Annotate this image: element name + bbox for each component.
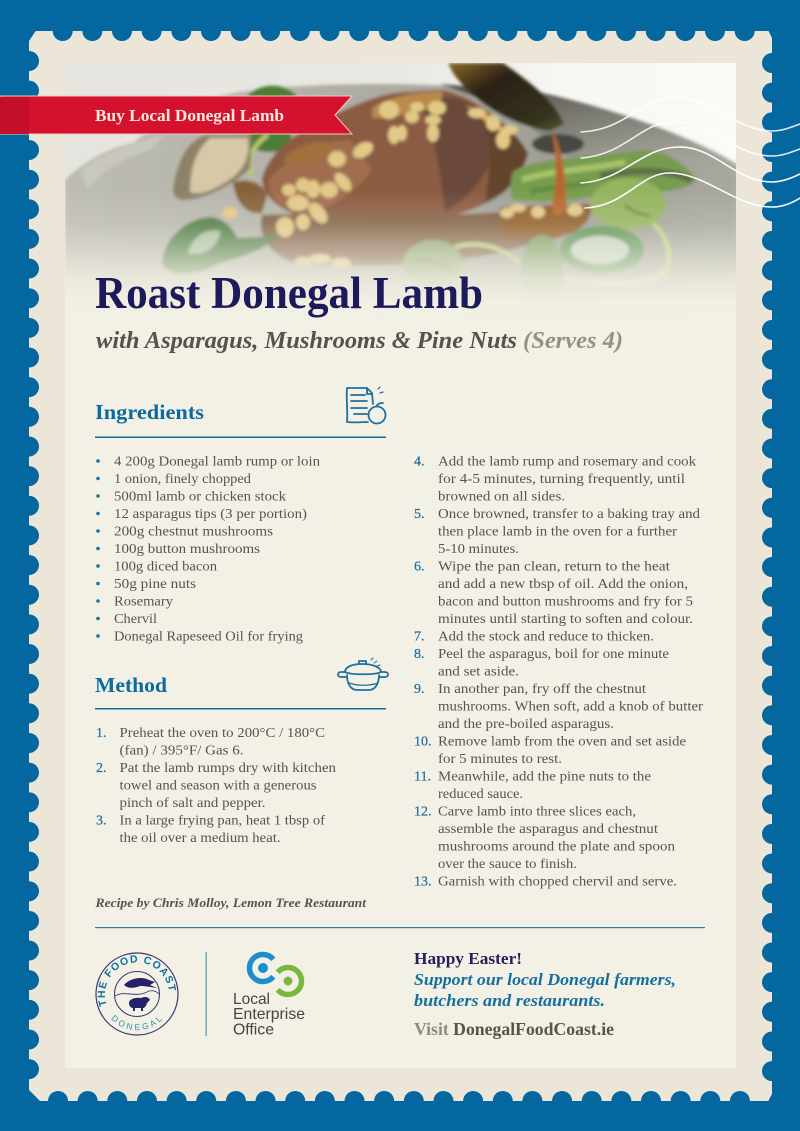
method steps 4-13: 4. (414, 454, 424, 470)
method steps 4-13: Garnish with chopped chervil and serve. (438, 874, 677, 888)
call to action: butchers and restaurants. (414, 991, 605, 1010)
asparagus (511, 150, 697, 202)
heading: method: Method (95, 673, 167, 697)
method steps 4-13: Meanwhile, add the pine nuts to the (438, 768, 651, 784)
ribbon: Buy Local Donegal Lamb (0, 96, 352, 134)
method steps 4-13: over the sauce to finish. (438, 856, 577, 871)
method steps 4-13: In another pan, fry off the chestnut (438, 681, 646, 696)
ingredients list: 12 asparagus tips (3 per portion) (114, 506, 307, 521)
logo: The Food Coast Donegal (95, 952, 179, 1036)
logo: Local Enterprise Office: Office (233, 1022, 274, 1038)
ribbon: Buy Local Donegal Lamb: Buy Local Donegal Lamb (95, 106, 284, 125)
method steps 1-3: 3. (96, 814, 106, 828)
method steps 1-3: towel and season with a generous (120, 778, 316, 792)
ingredients list: 100g diced bacon (114, 558, 217, 574)
method steps 4-13: then place lamb in the oven for a further (438, 524, 678, 538)
logo: The Food Coast Donegal: THE FOOD COAST (98, 955, 176, 1007)
method steps 4-13: for 5 minutes to rest. (438, 751, 562, 766)
call to action: Visit DonegalFoodCoast.ie (414, 1019, 614, 1039)
food photo (65, 63, 736, 296)
dark shape under spoon (532, 134, 584, 154)
ingredients list: Donegal Rapeseed Oil for frying (114, 628, 303, 644)
method steps 1-3: Pat the lamb rumps dry with kitchen (120, 760, 336, 775)
method steps 1-3: pinch of salt and pepper. (120, 795, 266, 810)
method steps 4-13: Once browned, transfer to a baking tray and (438, 506, 700, 521)
method steps 4-13: bacon and button mushrooms and fry for 5 (438, 594, 693, 608)
method steps 4-13: Wipe the pan clean, return to the heat (438, 558, 670, 574)
icon: recipe sheet with fruit (347, 387, 386, 424)
method steps 4-13: reduced sauce. (438, 786, 523, 801)
icon: cooking pot (338, 658, 388, 690)
method steps 4-13: 9. (414, 682, 424, 697)
call to action: Support our local Donegal farmers, (414, 970, 676, 989)
leaf behind ribbon (247, 86, 297, 152)
logo: Local Enterprise Office: Enterprise (233, 1006, 305, 1023)
ingredients list (96, 454, 320, 644)
method steps 4-13: 13. (414, 874, 432, 890)
heading: ingredients: Ingredients (95, 400, 204, 424)
method steps 1-3: the oil over a medium heat. (120, 830, 280, 845)
round leaves and stems (651, 222, 672, 276)
recipe credit: Recipe by Chris Molloy, Lemon Tree Restaurant (94, 895, 366, 910)
method steps 4-13: Add the stock and reduce to thicken. (438, 628, 654, 644)
logo: Local Enterprise Office (233, 955, 305, 1038)
method steps 4-13: 7. (414, 630, 424, 644)
method steps 4-13: for 4-5 minutes, turning frequently, until (438, 471, 685, 486)
ingredients list: Chervil (114, 611, 157, 626)
call to action: Happy Easter! (414, 949, 522, 968)
panel: ingredients (95, 387, 386, 644)
panel: method (95, 658, 388, 845)
method steps 4-13: Remove lamb from the oven and set aside (438, 734, 686, 748)
method steps 4-13: 8. (414, 647, 424, 662)
method steps 4-13: Carve lamb into three slices each, (438, 804, 636, 818)
method steps 1-3: In a large frying pan, heat 1 tbsp of (120, 812, 326, 828)
gravy (233, 181, 267, 213)
method steps 4-13: 11. (414, 770, 431, 784)
title: Roast Donegal Lamb (95, 268, 483, 318)
method steps 1-3 (96, 725, 336, 845)
method steps 4-13: minutes until starting to soften and colour. (438, 611, 693, 626)
method steps 1-3: (fan) / 395°F/ Gas 6. (120, 742, 244, 758)
ingredients list: 500ml lamb or chicken stock (114, 488, 286, 504)
ingredients list: 1 onion, finely chopped (114, 471, 251, 486)
method steps 4-13: mushrooms. When soft, add a knob of butter (438, 698, 704, 714)
method steps 4-13: 5-10 minutes. (438, 541, 519, 556)
method steps 4-13: and add a new tbsp of oil. Add the onion, (438, 576, 688, 591)
logo: Local Enterprise Office: Local (233, 991, 270, 1008)
method steps 4-13: 12. (414, 804, 432, 820)
method steps 1-3: Preheat the oven to 200°C / 180°C (120, 725, 325, 740)
method steps 4-13 (414, 454, 704, 890)
method steps 4-13: and set aside. (438, 664, 519, 678)
ingredients list: Rosemary (114, 594, 173, 608)
logo: The Food Coast Donegal: DONEGAL (111, 1014, 162, 1030)
method steps 4-13: assemble the asparagus and chestnut (438, 821, 658, 836)
call to action (414, 949, 676, 1039)
method steps 1-3: 1. (96, 726, 106, 741)
subtitle: with Asparagus, Mushrooms & Pine Nuts (Serves 4) (96, 328, 623, 354)
method steps 4-13: 10. (414, 734, 432, 750)
postmark wavy lines (581, 97, 800, 208)
method steps 1-3: 2. (96, 761, 106, 776)
method steps 4-13: 5. (414, 507, 424, 522)
method steps 4-13: mushrooms around the plate and spoon (438, 838, 675, 854)
ingredients list: 100g button mushrooms (114, 541, 260, 556)
method steps 4-13: browned on all sides. (438, 488, 565, 504)
lamb slices (260, 88, 493, 217)
spoon and sauce (448, 63, 564, 131)
ingredients list: 200g chestnut mushrooms (114, 524, 273, 538)
method steps 4-13: Add the lamb rump and rosemary and cook (438, 454, 696, 468)
method steps 4-13: Peel the asparagus, boil for one minute (438, 646, 669, 661)
method steps 4-13: and the pre-boiled asparagus. (438, 716, 614, 731)
mushroom (173, 135, 252, 200)
pine nuts (222, 101, 583, 268)
method steps 4-13: 6. (414, 560, 424, 574)
ingredients list: 4 200g Donegal lamb rump or loin (114, 454, 320, 468)
lower left leaf (162, 217, 278, 274)
ingredients list: 50g pine nuts (114, 576, 196, 591)
